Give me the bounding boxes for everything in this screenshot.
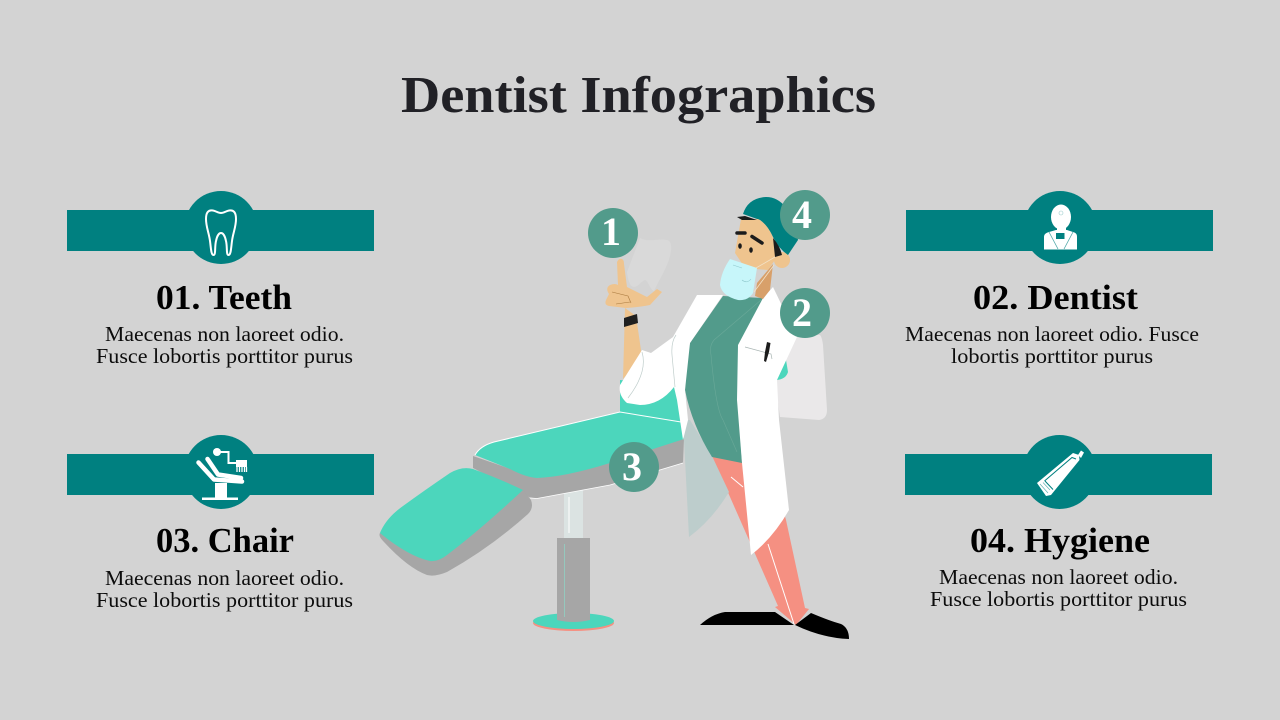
text: hygiene: Maecenas non laoreet odio. (939, 565, 1178, 589)
mask (720, 257, 775, 300)
coat left and sleeve (620, 295, 723, 440)
text: dentist (905, 322, 1199, 368)
chair pole (564, 490, 583, 539)
chair (380, 380, 684, 631)
seat top (475, 412, 684, 478)
badge 3: 3 (622, 444, 642, 489)
heading: chair: 03. Chair (156, 521, 294, 560)
icon: dental chair (184, 435, 258, 509)
coat right (737, 287, 797, 555)
pen in pocket (764, 342, 770, 362)
badge 4: 4 (792, 192, 812, 237)
neck (755, 264, 773, 299)
illustration: dentist leaning on chair (380, 197, 849, 639)
badge 2 (780, 288, 830, 338)
text: hygiene (930, 565, 1187, 611)
text: dentist: lobortis porttitor purus (951, 344, 1153, 368)
chair base (533, 615, 614, 631)
heading: dentist: 02. Dentist (973, 278, 1138, 317)
scrubs (685, 296, 763, 463)
forearm (623, 308, 642, 379)
text: teeth: Fusce lobortis porttitor purus (96, 344, 353, 368)
banner: chair (67, 454, 374, 495)
banner: dentist (906, 210, 1213, 251)
back cushion (775, 335, 827, 420)
panel: dentist (905, 191, 1213, 368)
cap (743, 197, 798, 255)
tooth held up (627, 238, 671, 291)
panel: hygiene (905, 435, 1212, 611)
hair (737, 216, 782, 257)
hand (605, 259, 662, 308)
coat tail translucent (683, 420, 729, 537)
banner: hygiene (905, 454, 1212, 495)
text: dentist: Maecenas non laoreet odio. Fusce (905, 322, 1199, 346)
eyebrows and eyes (737, 233, 762, 253)
text: chair: Maecenas non laoreet odio. (105, 566, 344, 590)
text: teeth: Maecenas non laoreet odio. (105, 322, 344, 346)
text: hygiene: Fusce lobortis porttitor purus (930, 587, 1187, 611)
text: teeth (96, 322, 353, 368)
watch (624, 314, 638, 327)
icon: toothpaste (1022, 435, 1096, 509)
heading: teeth: 01. Teeth (156, 278, 292, 317)
face (735, 219, 777, 270)
badge 4 (780, 190, 830, 240)
seat side (473, 438, 684, 498)
panel: teeth (67, 191, 374, 368)
text: chair (96, 566, 353, 612)
text: chair: Fusce lobortis porttitor purus (96, 588, 353, 612)
badge 2: 2 (792, 290, 812, 335)
icon: tooth (184, 191, 258, 264)
badge 3 (609, 442, 659, 492)
title: Dentist Infographics (401, 67, 876, 124)
heading: hygiene: 04. Hygiene (970, 521, 1150, 560)
panel: chair (67, 435, 374, 612)
ear (774, 252, 790, 268)
badge 1: 1 (601, 209, 621, 254)
shoes (700, 612, 794, 625)
icon: dentist (1024, 191, 1096, 264)
chair back (620, 380, 683, 425)
legs (712, 456, 809, 625)
banner: teeth (67, 210, 374, 251)
footrest (380, 490, 532, 576)
badge 1 (588, 208, 638, 258)
